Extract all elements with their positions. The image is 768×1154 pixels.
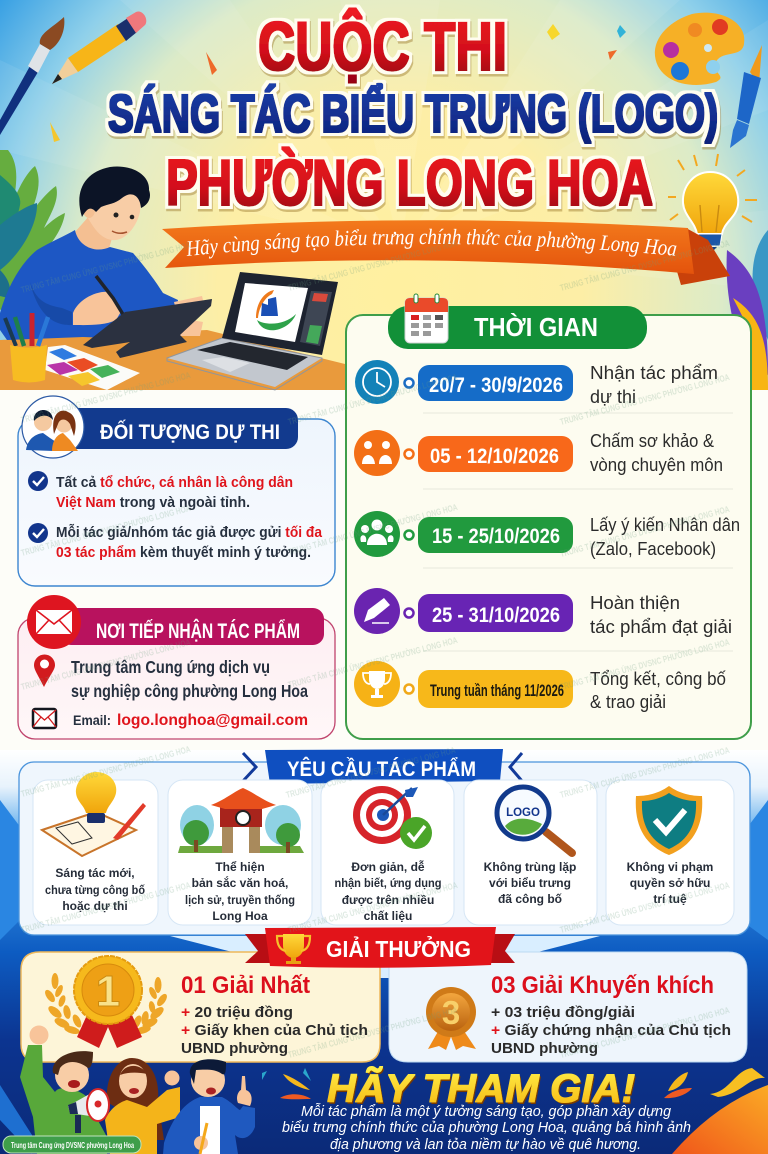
watermarks: TRUNG TÂM CUNG ỨNG DVSNC PHƯỜNG LONG HOA	[20, 743, 192, 799]
neck	[75, 215, 112, 253]
watermarks: TRUNG TÂM CUNG ỨNG DVSNC PHƯỜNG LONG HOA	[20, 636, 192, 692]
icon: megaphone	[68, 1089, 109, 1133]
watermarks: TRUNG TÂM CUNG ỨNG DVSNC PHƯỜNG LONG HOA	[287, 237, 459, 293]
panel: first prize: + Giấy khen của Chủ tịch	[181, 1022, 368, 1039]
organiser badge	[3, 1136, 141, 1153]
watermarks: TRUNG TÂM CUNG ỨNG DVSNC PHƯỜNG LONG HOA	[285, 744, 457, 800]
panel: submission place	[18, 595, 335, 739]
icon: map pin	[34, 654, 55, 687]
title	[108, 8, 718, 219]
title line 1: CUỘC THI	[258, 8, 507, 85]
card 2: lịch sử, truyền thống	[185, 893, 295, 907]
card 3: Đơn giản, dễ	[351, 859, 425, 874]
timeline row 5	[354, 661, 726, 712]
email: Email:	[73, 712, 111, 728]
icon: gold medal: 1	[96, 967, 120, 1016]
person: man in blue jacket	[163, 1059, 255, 1154]
panel: encouragement prizes: UBND phường	[491, 1040, 598, 1057]
bullet 1	[28, 471, 293, 511]
hand with stylus	[73, 292, 122, 325]
timeline row 4: tác phẩm đạt giải	[590, 616, 732, 637]
icon: gold medal	[43, 956, 169, 1048]
illustration: foliage left and right	[0, 150, 768, 390]
timeline row 1: 20/7 - 30/9/2026	[429, 374, 563, 397]
timeline row 4	[354, 588, 732, 637]
timeline row 3: 15 - 25/10/2026	[432, 525, 560, 548]
card 1	[33, 772, 158, 925]
icon: magnifier logo: LOGO	[506, 807, 540, 819]
illustration: cheering people	[20, 1026, 255, 1154]
card 4	[464, 780, 597, 925]
address: Trung tâm Cung ứng dịch vụ	[71, 657, 270, 677]
panel: timeline	[346, 294, 751, 739]
watermarks: TRUNG TÂM CUNG ỨNG DVSNC PHƯỜNG LONG HOA	[287, 634, 459, 690]
bullet 2	[28, 523, 323, 561]
illustration: colour swatches	[45, 345, 140, 390]
header: participants	[60, 408, 298, 449]
timeline row 4: Hoàn thiện	[590, 592, 680, 613]
card 5: quyền sở hữu	[630, 876, 710, 890]
timeline row 3: (Zalo, Facebook)	[590, 538, 716, 559]
icon: shield	[636, 786, 702, 855]
illustration: laptop with logo	[167, 272, 338, 390]
icon: target	[353, 786, 432, 849]
decorative chevrons	[243, 753, 522, 781]
card 4: Không trùng lặp	[484, 860, 576, 874]
desk	[0, 330, 345, 390]
card 5: trí tuệ	[653, 892, 687, 906]
timeline row 5: Trung tuần tháng 11/2026	[430, 681, 564, 700]
icon: idea notebook	[42, 772, 146, 856]
illustration: drawing tablet	[83, 299, 212, 358]
tagline banner	[162, 220, 730, 285]
timeline row 1	[355, 360, 718, 407]
icon: two people	[22, 396, 84, 458]
panel: encouragement prizes: 03 Giải Khuyến khích	[491, 972, 714, 999]
call to action text: biểu trưng chính thức của phường Long Hoa, quảng bá hình ảnh	[282, 1119, 691, 1136]
timeline row 5: Tổng kết, công bố	[590, 668, 726, 689]
panel: participants	[18, 396, 335, 586]
watermarks: TRUNG TÂM CUNG ỨNG DVSNC PHƯỜNG LONG HOA	[20, 502, 192, 558]
card 1: chưa từng công bố	[45, 883, 145, 897]
icon: temple gate	[178, 788, 304, 853]
timeline row 1: Nhận tác phẩm	[590, 362, 718, 383]
watermarks: TRUNG TÂM CUNG ỨNG DVSNC PHƯỜNG LONG HOA	[287, 879, 459, 935]
address	[71, 657, 308, 701]
panel: requirements	[19, 749, 750, 935]
timeline row 3: Lấy ý kiến Nhân dân	[590, 514, 740, 535]
head	[86, 184, 141, 240]
icon: paint palette	[655, 13, 744, 85]
card 2	[168, 780, 312, 925]
icon: trophy	[277, 934, 310, 964]
illustration: yellow ribbon	[710, 1068, 765, 1097]
header text: ĐỐI TƯỢNG DỰ THI	[100, 420, 280, 444]
illustration: artist	[0, 167, 204, 340]
icon: email	[33, 709, 56, 728]
person: woman in yellow	[105, 1058, 180, 1154]
card 2: bản sắc văn hoá,	[192, 875, 288, 890]
panel: first prize	[21, 952, 380, 1062]
icon: bronze medal: 3	[442, 994, 460, 1031]
card 5: Không vi phạm	[627, 860, 713, 874]
illustration: pencil cup	[5, 313, 48, 382]
timeline row 2: vòng chuyên môn	[590, 454, 723, 475]
tagline text: Hãy cùng sáng tạo biểu trưng chính thức của phường Long Hoa	[186, 228, 676, 258]
timeline row 4: 25 - 31/10/2026	[432, 604, 560, 627]
panel: encouragement prizes: + 03 triệu đồng/giải	[491, 1004, 635, 1021]
timeline row 5: & trao giải	[590, 691, 666, 712]
timeline row 1: dự thi	[590, 386, 636, 407]
panel: first prize: + 20 triệu đồng	[181, 1004, 293, 1021]
timeline row 2	[354, 430, 723, 476]
watermarks	[20, 237, 731, 1060]
timeline row 2: 05 - 12/10/2026	[430, 445, 559, 468]
card 4: đã công bố	[498, 892, 562, 906]
watermarks: TRUNG TÂM CUNG ỨNG DVSNC PHƯỜNG LONG HOA	[20, 239, 192, 295]
icon: red envelope	[27, 595, 81, 649]
panel: first prize: 01 Giải Nhất	[181, 972, 310, 999]
icon: light bulb	[668, 154, 757, 252]
icon: bronze medal	[426, 987, 476, 1050]
icon: magnifier logo	[497, 787, 572, 853]
card 3: được trên nhiều	[342, 893, 434, 907]
icon: paint brush	[0, 17, 64, 135]
header: timeline	[388, 306, 647, 349]
card 2: Thể hiện	[215, 860, 265, 874]
watermarks: TRUNG TÂM CUNG ỨNG DVSNC PHƯỜNG LONG HOA	[20, 879, 192, 935]
illustration: orange swoosh	[672, 1085, 768, 1154]
watermarks: TRUNG TÂM CUNG ỨNG DVSNC PHƯỜNG LONG HOA	[287, 1004, 459, 1060]
prize ribbon	[245, 927, 515, 968]
icon: pencil	[52, 11, 146, 84]
watermarks: TRUNG TÂM CUNG ỨNG DVSNC PHƯỜNG LONG HOA	[20, 369, 192, 425]
header: submission	[60, 608, 324, 645]
email: logo.longhoa@gmail.com	[117, 712, 308, 729]
bullet 2: 03 tác phẩm kèm thuyết minh ý tưởng.	[56, 545, 311, 561]
bullet 1: Việt Nam trong và ngoài tỉnh.	[56, 495, 250, 511]
hair	[79, 167, 150, 217]
card 4: với biểu trưng	[489, 876, 571, 890]
card 1: hoặc dự thi	[62, 899, 128, 913]
panel: encouragement prizes: + Giấy chứng nhận của Chủ tịch	[491, 1022, 731, 1039]
call to action heading: HÃY THAM GIA!	[327, 1065, 635, 1111]
call to action text: Mỗi tác phẩm là một ý tưởng sáng tạo, góp phần xây dựng	[301, 1103, 672, 1120]
icon: fountain pen	[730, 45, 762, 148]
far hand	[174, 296, 204, 336]
ribbon text: GIẢI THƯỞNG	[326, 934, 471, 962]
call to action text	[282, 1103, 691, 1153]
ear	[83, 202, 95, 218]
organiser badge: Trung tâm Cung ứng DVSNC phường Long Hoa	[11, 1140, 134, 1150]
call to action text: địa phương và lan tỏa niềm tự hào về quê hương.	[330, 1136, 641, 1153]
watermarks: TRUNG TÂM CUNG ỨNG DVSNC PHƯỜNG LONG HOA	[287, 371, 459, 427]
card 5	[606, 780, 734, 925]
panel: first prize: UBND phường	[181, 1040, 288, 1057]
watermarks: TRUNG TÂM CUNG ỨNG DVSNC PHƯỜNG LONG HOA	[287, 501, 459, 557]
header text: YÊU CẦU TÁC PHẨM	[287, 757, 476, 781]
icon: calendar	[405, 294, 448, 343]
card 3: nhận biết, ứng dụng	[334, 876, 442, 890]
card 1: Sáng tác mới,	[55, 866, 135, 880]
header: requirements	[265, 749, 503, 784]
bullet 2: Mỗi tác giả/nhóm tác giả được gửi tối đa	[56, 524, 323, 541]
address: sự nghiệp công phường Long Hoa	[71, 681, 308, 701]
confetti around call to action	[262, 1068, 692, 1099]
card 2: Long Hoa	[212, 909, 268, 923]
header text: THỜI GIAN	[474, 312, 598, 342]
header text: NƠI TIẾP NHẬN TÁC PHẨM	[96, 619, 300, 643]
decorative confetti	[50, 24, 626, 142]
person: man in green hoodie	[20, 1026, 107, 1154]
panel: encouragement prizes	[389, 952, 747, 1062]
bullet 1: Tất cả tổ chức, cá nhân là công dân	[56, 475, 293, 491]
card 3	[321, 780, 454, 925]
card 3: chất liệu	[364, 909, 412, 923]
timeline row 3	[354, 511, 740, 559]
sweater	[0, 230, 178, 340]
timeline row 2: Chấm sơ khảo &	[590, 430, 715, 451]
